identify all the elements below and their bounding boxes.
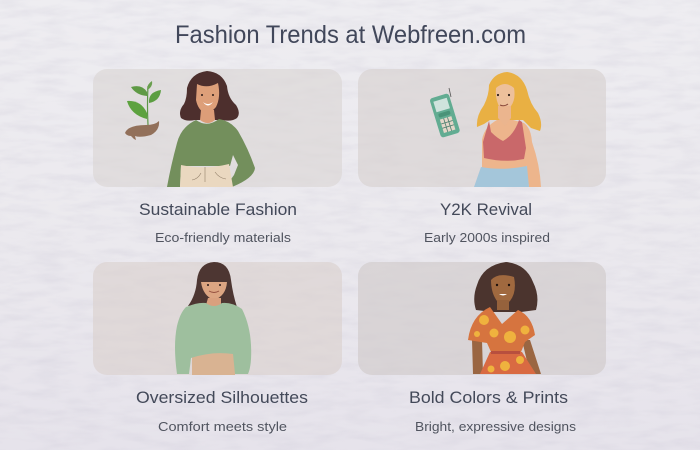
text: comfort meets style: Comfort meets style: [158, 419, 287, 434]
heading: sustainable fashion: Sustainable Fashion: [139, 200, 297, 219]
text: eco-friendly materials: Eco-friendly materials: [155, 230, 292, 245]
heading: bold colors and prints: Bold Colors & Prints: [409, 388, 568, 407]
figure: woman in floral two-piece: [468, 262, 541, 374]
panel: bold colors and prints: [358, 262, 606, 375]
heading: oversized silhouettes: Oversized Silhouettes: [136, 388, 308, 407]
text: early 2000s inspired: Early 2000s inspired: [424, 230, 550, 245]
panel: oversized silhouettes: [93, 262, 342, 375]
heading: y2k revival: Y2K Revival: [440, 200, 532, 219]
title: Fashion Trends at Webfreen.com: [175, 21, 526, 49]
panel: sustainable fashion: [93, 69, 342, 187]
figure: woman in green sweater: [167, 71, 255, 187]
icon: retro mobile phone: [429, 88, 460, 138]
text: bright expressive designs: Bright, expressive designs: [415, 419, 577, 434]
figure: blonde woman in coral crop top: [474, 72, 541, 187]
panel: y2k revival: [358, 69, 606, 187]
figure: woman in oversized mint sweater: [175, 262, 251, 375]
icon: plant in hand: [125, 81, 161, 140]
